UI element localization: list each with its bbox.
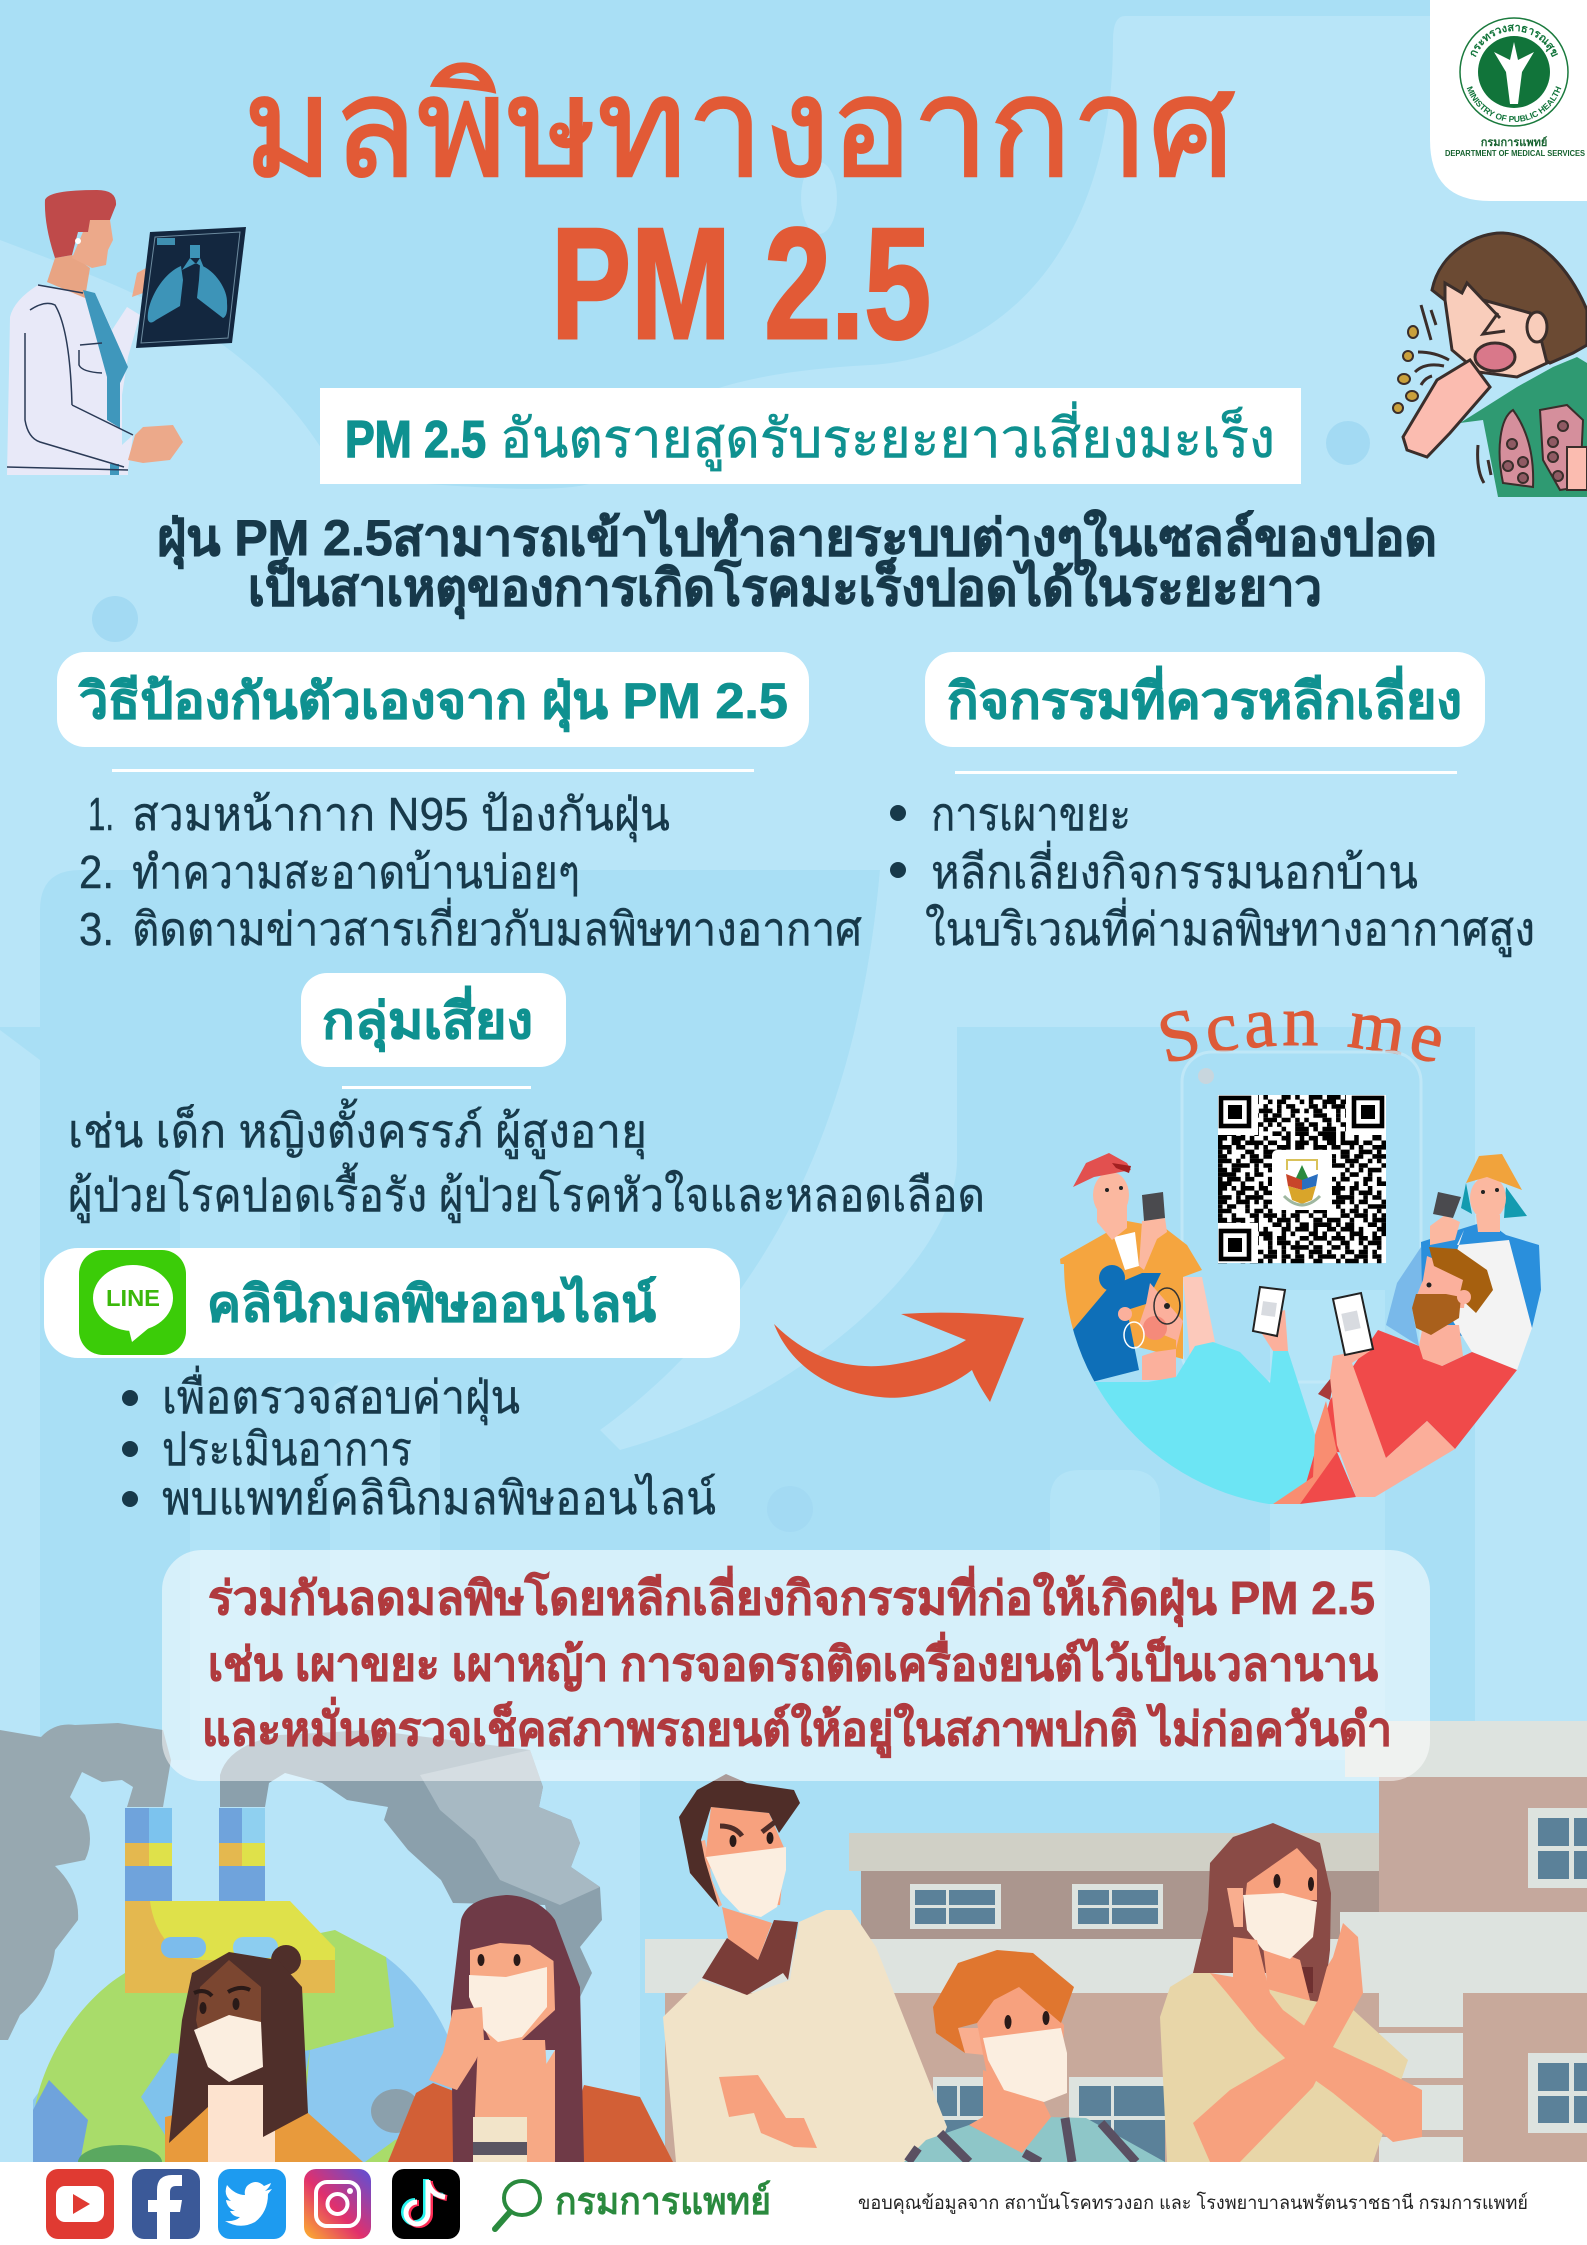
icon: tiktok	[392, 2169, 460, 2239]
panel: online clinic: พบแพทย์คลินิกมลพิษออนไลน์	[162, 1472, 716, 1524]
panel: prevention: 3.	[79, 903, 114, 955]
illustration: coughing person with lungs	[1393, 233, 1587, 497]
panel: online clinic: คลินิกมลพิษออนไลน์	[207, 1275, 657, 1332]
logo: department of medical services	[1430, 0, 1587, 201]
panel: risk groups	[68, 973, 985, 1223]
panel: risk groups: กลุ่มเสี่ยง	[322, 986, 533, 1052]
callout: subtitle banner	[320, 388, 1301, 484]
panel: risk groups: เช่น เด็ก หญิงตั้งครรภ์ ผู้สูงอายุ	[68, 1098, 647, 1160]
sky	[0, 1760, 1587, 2162]
factory	[125, 1808, 335, 1993]
panel: activities to avoid	[890, 652, 1535, 957]
callout: reduce pollution: และหมั่นตรวจเช็คสภาพรถยนต์ให้อยู่ในสภาพปกติ ไม่ก่อควันดำ	[202, 1697, 1392, 1758]
panel: online clinic	[44, 1248, 740, 1524]
panel: risk groups: ผู้ป่วยโรคปอดเรื้อรัง ผู้ป่วยโรคหัวใจและหลอดเลือด	[68, 1162, 985, 1223]
panel: prevention: 2.	[79, 846, 114, 898]
person: boy with orange hair	[904, 1950, 1165, 2162]
panel: activities to avoid: ในบริเวณที่ค่ามลพิษทางอากาศสูง	[925, 897, 1535, 957]
globe and hill	[33, 1930, 480, 2179]
website search label	[495, 2180, 771, 2229]
smoke	[0, 1723, 602, 2133]
panel: activities to avoid: หลีกเลี่ยงกิจกรรมนอกบ้าน	[931, 840, 1418, 898]
panel: prevention	[57, 652, 862, 955]
person: man with collar	[663, 1774, 947, 2162]
icon: twitter	[218, 2169, 286, 2239]
callout: reduce pollution: เช่น เผาขยะ เผาหญ้า การจอดรถติดเครื่องยนต์ไว้เป็นเวลานาน	[208, 1632, 1379, 1691]
panel: activities to avoid: การเผาขยะ	[931, 788, 1131, 840]
intro text	[157, 509, 1437, 619]
panel: online clinic: เพื่อตรวจสอบค่าฝุ่น	[162, 1365, 520, 1426]
panel: prevention: ติดตามข่าวสารเกี่ยวกับมลพิษทางอากาศ	[132, 897, 862, 955]
illustration: city scene with masked people	[0, 1721, 1587, 2179]
footer	[0, 2162, 1587, 2245]
heading: scan me	[1160, 1010, 1441, 1062]
panel: activities to avoid: กิจกรรมที่ควรหลีกเลี่ยง	[947, 666, 1462, 729]
callout: subtitle banner: อันตรายสูดรับระยะยาวเสี่ยงมะเร็ง	[500, 401, 1275, 471]
logo: department of medical services: MINISTRY OF PUBLIC HEALTH	[1466, 86, 1562, 122]
icon: LINE: LINE	[106, 1285, 160, 1311]
panel: prevention: วิธีป้องกันตัวเองจาก ฝุ่น PM 2.5	[78, 673, 788, 732]
heading: scan me: Scan me	[1160, 1010, 1441, 1062]
person: woman with long hair	[388, 1895, 673, 2162]
title: PM 2.5	[551, 196, 931, 372]
panel: prevention: 1.	[88, 788, 114, 840]
callout: reduce pollution	[162, 1550, 1430, 1781]
illustration: doctor with x-ray	[7, 190, 246, 475]
website search label: กรมการแพทย์	[555, 2180, 771, 2223]
credit text: ขอบคุณข้อมูลจาก สถาบันโรคทรวงอก และ โรงพยาบาลนพรัตนราชธานี กรมการแพทย์	[858, 2191, 1528, 2215]
intro text: ฝุ่น PM 2.5สามารถเข้าไปทำลายระบบต่างๆในเซลล์ของปอด	[157, 509, 1437, 569]
illustration: people scanning	[1060, 1052, 1541, 1504]
panel: online clinic: ประเมินอาการ	[162, 1423, 412, 1475]
person: woman with blue hair	[1070, 1265, 1315, 1504]
arrow	[774, 1313, 1024, 1402]
icon: LINE	[79, 1250, 186, 1355]
person: woman crossing arms	[1160, 1823, 1422, 2162]
buildings	[645, 1721, 1587, 2162]
person: woman with orange hat	[1386, 1154, 1541, 1370]
panel: prevention: ทำความสะอาดบ้านบ่อยๆ	[132, 846, 580, 898]
icon: facebook	[132, 2169, 200, 2239]
title: มลพิษทางอากาศ	[243, 49, 1235, 206]
logo: department of medical services: กรมการแพทย์	[1481, 136, 1547, 149]
QR code	[1218, 1095, 1386, 1263]
QR finder patterns	[1218, 1095, 1386, 1263]
callout: subtitle banner: PM 2.5	[345, 411, 486, 469]
intro text: เป็นสาเหตุของการเกิดโรคมะเร็งปอดได้ในระยะยาว	[248, 557, 1322, 619]
QR logo	[1272, 1150, 1332, 1210]
person: man with red cap	[1060, 1153, 1215, 1359]
person: bearded man in red shirt	[1273, 1247, 1517, 1504]
logo: department of medical services: กระทรวงสาธารณสุข	[1470, 24, 1558, 58]
title	[243, 49, 1235, 372]
icon: instagram	[304, 2169, 371, 2239]
callout: reduce pollution: ร่วมกันลดมลพิษโดยหลีกเลี่ยงกิจกรรมที่ก่อให้เกิดฝุ่น PM 2.5	[208, 1566, 1375, 1627]
panel: prevention: สวมหน้ากาก N95 ป้องกันฝุ่น	[132, 788, 670, 843]
icon: youtube	[46, 2169, 114, 2239]
person: girl with bun	[165, 1945, 363, 2162]
